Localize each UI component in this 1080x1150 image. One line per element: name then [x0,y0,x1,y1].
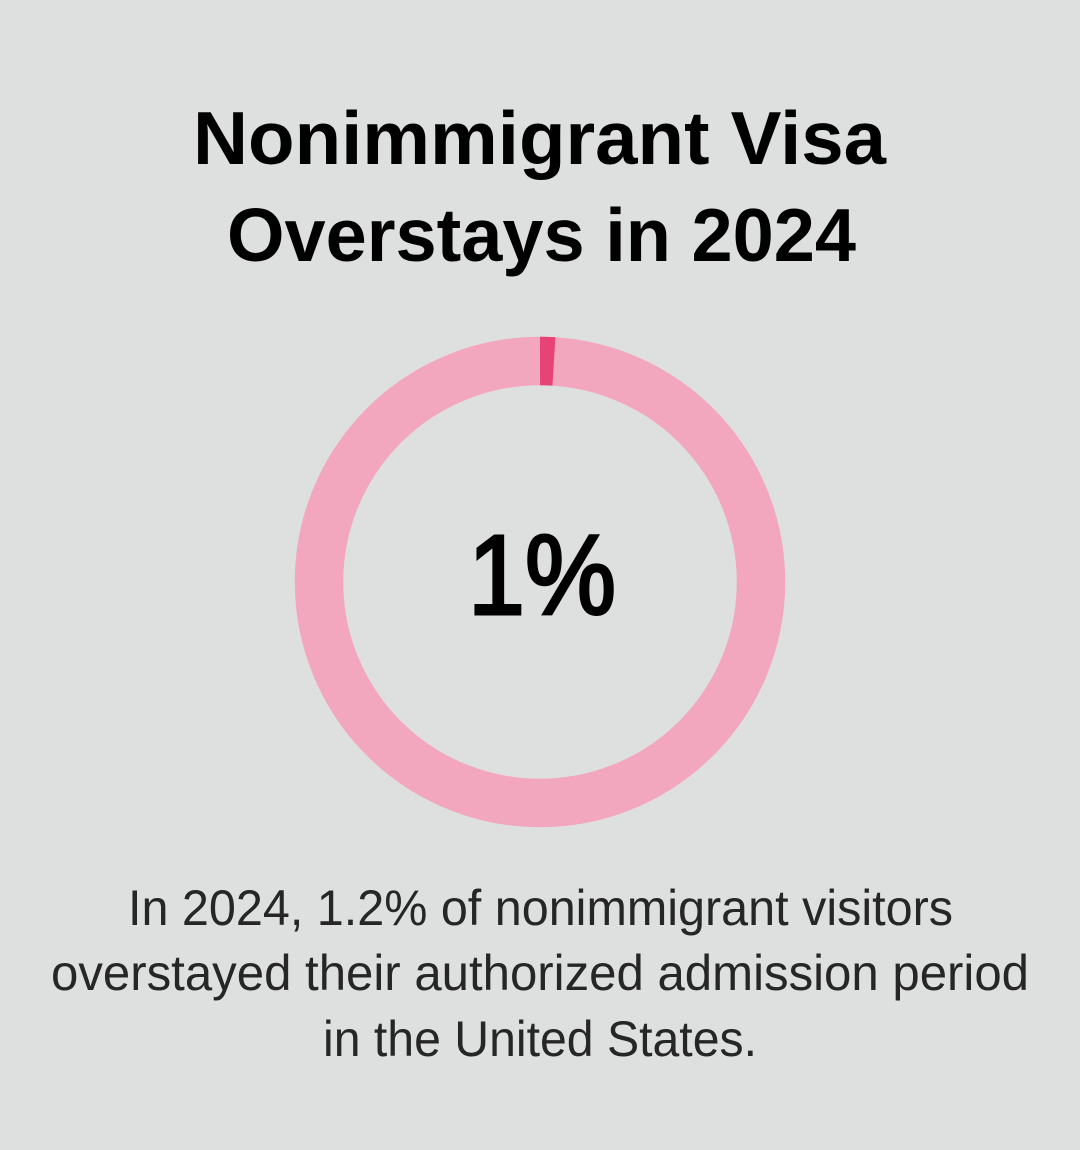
value: 1%: 1% [468,512,616,638]
highlighted segment: 1% [540,337,554,386]
description [51,880,1029,1067]
description: overstayed their authorized admission period [51,945,1029,1001]
donut chart [319,361,761,803]
description: in the United States. [323,1011,757,1067]
description: In 2024, 1.2% of nonimmigrant visitors [128,880,953,936]
title: Overstays in 2024 [227,193,856,277]
title: Nonimmigrant Visa [193,96,887,180]
title [193,96,887,277]
